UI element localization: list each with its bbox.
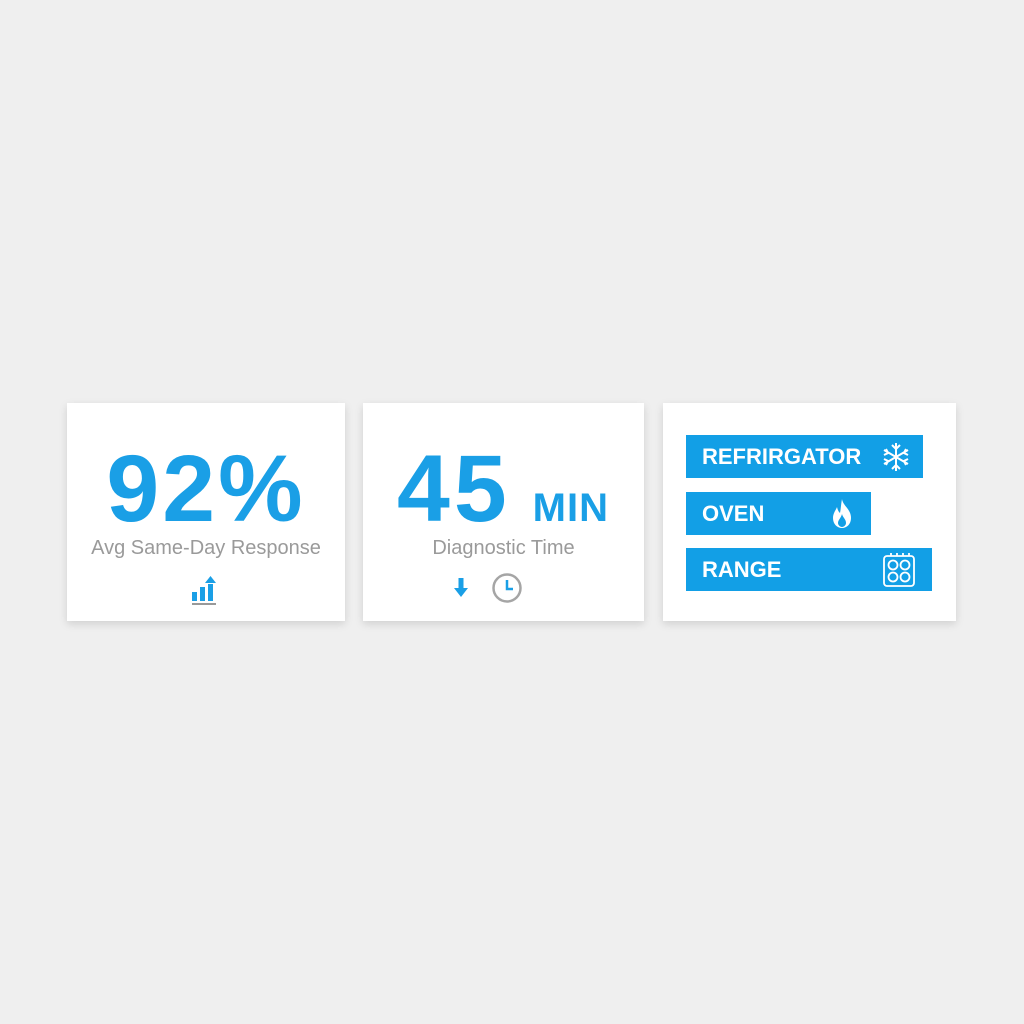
- stat: 92%: 92%: [106, 436, 306, 542]
- bar: oven: OVEN: [702, 501, 764, 526]
- bar: refrigerator: [686, 435, 923, 478]
- bar: range: RANGE: [702, 557, 781, 582]
- label: Avg Same-Day Response: Avg Same-Day Response: [91, 537, 321, 559]
- bar: oven: [686, 492, 871, 535]
- icon: snowflake: [884, 443, 908, 471]
- label: Diagnostic Time: Diagnostic Time: [432, 537, 575, 559]
- icon: rising bar chart: [192, 576, 216, 605]
- icon: down arrow: [454, 578, 468, 597]
- icon: flame: [833, 499, 851, 528]
- panel: appliances: [663, 403, 956, 621]
- bar: refrigerator: REFRIRGATOR: [702, 444, 861, 469]
- stat: 45 MIN: 45 MIN: [397, 436, 609, 542]
- icon: clock: [492, 573, 522, 603]
- icon: cooktop: [883, 553, 915, 587]
- bar: range: [686, 548, 932, 591]
- panel: same-day response: [67, 403, 345, 621]
- panel: diagnostic time: [363, 403, 644, 621]
